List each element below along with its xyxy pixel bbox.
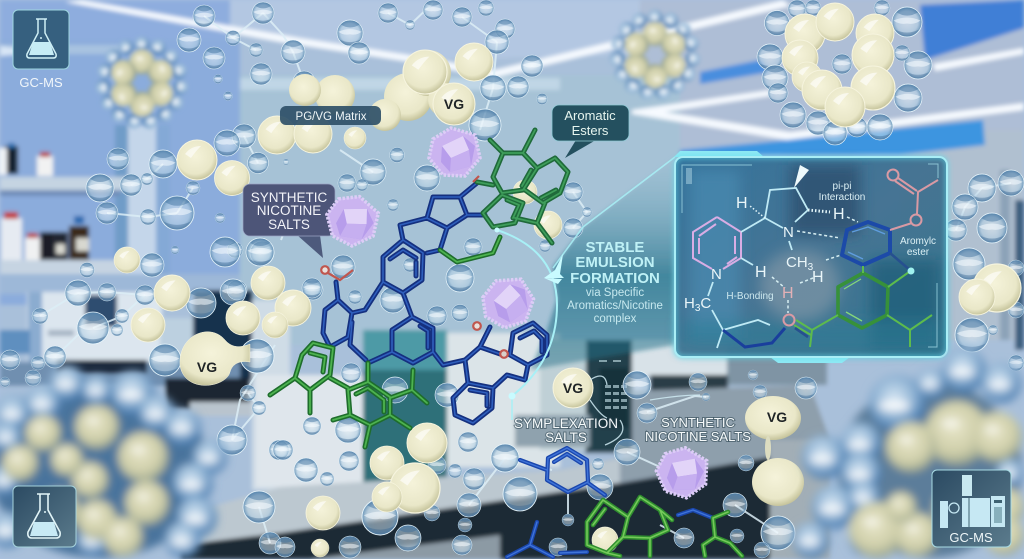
callout: synthetic nicotine salts <box>243 184 335 258</box>
callout: aromatic esters: Aromatic <box>564 108 616 123</box>
VG labels: VG <box>563 380 583 396</box>
icon: flask GC-MS top left: GC-MS <box>19 75 63 90</box>
stable emulsion heading: EMULSION <box>575 254 655 271</box>
panel blurred backdrop <box>680 165 940 350</box>
panel atom labels: N <box>783 224 794 241</box>
panel atom labels: H <box>684 295 695 312</box>
molecule: lower green rings <box>587 497 742 556</box>
instrument display grid <box>599 360 627 409</box>
symplexation salts label: SYMPLEXATION <box>514 416 618 431</box>
pink oxygen atom <box>784 314 794 326</box>
panel atom labels: 3 <box>808 262 814 273</box>
green aromatic ring <box>794 266 932 347</box>
callout: synthetic nicotine salts: SYNTHETIC <box>251 190 327 205</box>
lower synthetic nicotine salts label: SYNTHETIC <box>661 415 735 430</box>
panel atom labels: H <box>755 264 767 281</box>
panel atom labels: H <box>736 195 748 212</box>
lower synthetic nicotine salts label: NICOTINE SALTS <box>645 429 751 444</box>
blurred foreground cluster: bottom left <box>0 365 227 558</box>
nicotine salt crystal 3 <box>475 271 540 333</box>
cyan atom <box>908 268 914 274</box>
aromylc ester label: ester <box>907 247 930 258</box>
symplexation salts label <box>514 416 618 445</box>
panel atom labels: H <box>833 206 845 223</box>
panel atom labels: 3 <box>695 303 701 314</box>
VG labels <box>197 96 787 425</box>
stable emulsion subtext: via Specific <box>586 287 644 299</box>
molecule: symplexation salt ring <box>507 448 713 557</box>
panel atom labels: N <box>711 266 722 283</box>
VG labels: VG <box>197 359 217 375</box>
nicotine salt crystal 2 <box>319 187 386 252</box>
H-bonding label: H-Bonding <box>726 291 774 302</box>
icon: GC-MS instrument bottom right <box>932 470 1011 547</box>
icon: flask bottom left <box>13 486 76 547</box>
top right foreground cluster <box>757 0 932 145</box>
icon: GC-MS instrument bottom right: GC-MS <box>949 530 993 545</box>
VG labels: VG <box>444 96 464 112</box>
icon: flask GC-MS top left <box>13 10 69 90</box>
cyan connector arc and arrow <box>494 157 675 420</box>
lower synthetic nicotine salts label <box>645 415 751 444</box>
callout: PG/VG Matrix <box>280 106 381 125</box>
panel atom labels <box>684 195 845 314</box>
inset panel: molecular interactions <box>674 151 947 363</box>
molecule: aromatic esters top <box>477 130 568 243</box>
panel atom labels: H <box>812 269 824 286</box>
callout: PG/VG Matrix: PG/VG Matrix <box>296 111 367 123</box>
molecule: green aromatic rings centre <box>270 237 500 447</box>
teal glow behind stable emulsion text <box>530 157 675 370</box>
pyrrolidine ring <box>708 165 809 348</box>
stable emulsion subtext: Aromatics/Nicotine <box>567 300 663 312</box>
aromylc ester label <box>900 236 936 258</box>
VG labels: VG <box>767 409 787 425</box>
stable emulsion subtext <box>567 287 663 325</box>
panel frame <box>675 157 947 357</box>
symplexation salts label: SALTS <box>545 430 587 445</box>
callout: synthetic nicotine salts: NICOTINE <box>257 203 321 218</box>
callout: synthetic nicotine salts: SALTS <box>268 217 310 232</box>
thin callout curves <box>590 376 700 445</box>
pi-pi interaction label: Interaction <box>819 192 865 203</box>
blue aromatic ring <box>842 222 890 265</box>
blue lower chain <box>723 328 785 347</box>
blurred cluster: top centre <box>609 10 701 101</box>
pi-pi interaction label <box>819 181 865 203</box>
hashed wedge bonds <box>750 206 830 218</box>
stable emulsion heading: STABLE <box>586 239 644 256</box>
stable emulsion heading <box>570 239 660 287</box>
panel corner brackets <box>682 164 938 347</box>
pyridine ring pink <box>693 217 741 269</box>
carbonyl oxygen atoms <box>321 176 508 358</box>
callout: aromatic esters: Esters <box>572 123 609 138</box>
stable emulsion subtext: complex <box>594 313 637 325</box>
blurred foreground cluster: bottom right <box>793 348 1024 558</box>
callout: aromatic esters <box>552 105 629 158</box>
ester group pink <box>888 170 938 230</box>
aromylc ester label: Aromylc <box>900 236 936 247</box>
panel tick marks <box>686 168 692 184</box>
panel atom labels: CH <box>786 254 808 271</box>
nicotine salt crystal 4 <box>652 442 713 502</box>
pi-pi interaction label: pi-pi <box>833 181 851 192</box>
panel atom labels: H <box>782 285 794 302</box>
molecule: blue aromatic rings <box>323 183 547 423</box>
blurred cluster: top left <box>95 37 189 130</box>
dotted hydrogen bonds <box>772 217 858 313</box>
panel atom labels: C <box>700 295 711 312</box>
stable emulsion heading: FORMATION <box>570 270 660 287</box>
nicotine salt crystal 1 <box>429 128 480 176</box>
